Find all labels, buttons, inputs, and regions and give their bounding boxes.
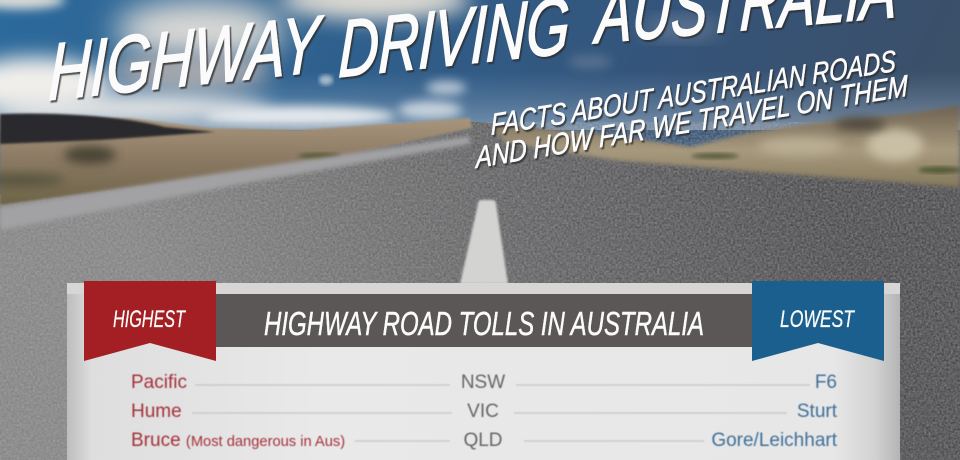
row: Bruce, QLD, Gore/Leichhart [131, 430, 838, 451]
main title [47, 0, 900, 118]
row: Bruce, QLD, Gore/Leichhart: Gore/Leichhart [711, 430, 838, 451]
ribbon: lowest [752, 281, 884, 361]
panel: highway road tolls [67, 281, 900, 460]
sky with clouds [0, 0, 960, 200]
row: Pacific, NSW, F6: Pacific [131, 372, 187, 393]
heading bar [215, 294, 753, 347]
lane marking [460, 200, 508, 284]
row: Pacific, NSW, F6: F6 [815, 372, 837, 393]
ribbon: highest [84, 281, 216, 361]
row: Pacific, NSW, F6: NSW [461, 372, 505, 393]
right landscape [490, 105, 960, 187]
road shoulder [0, 136, 470, 230]
road surface [0, 122, 960, 460]
row: Hume, VIC, Sturt: VIC [467, 401, 499, 422]
ribbon: lowest: LOWEST [780, 306, 856, 333]
row: Hume, VIC, Sturt: Sturt [797, 401, 838, 422]
row: Hume, VIC, Sturt: Hume [131, 401, 182, 422]
row: Bruce, QLD, Gore/Leichhart: Bruce (Most dangerous in Aus) [131, 430, 345, 451]
ribbon: highest: HIGHEST [113, 306, 187, 333]
row: Pacific, NSW, F6 [131, 372, 837, 393]
row: Hume, VIC, Sturt [131, 401, 838, 422]
row: Bruce, QLD, Gore/Leichhart: QLD [463, 430, 503, 451]
heading bar: HIGHWAY ROAD TOLLS IN AUSTRALIA [264, 305, 704, 342]
left landscape [0, 114, 472, 205]
